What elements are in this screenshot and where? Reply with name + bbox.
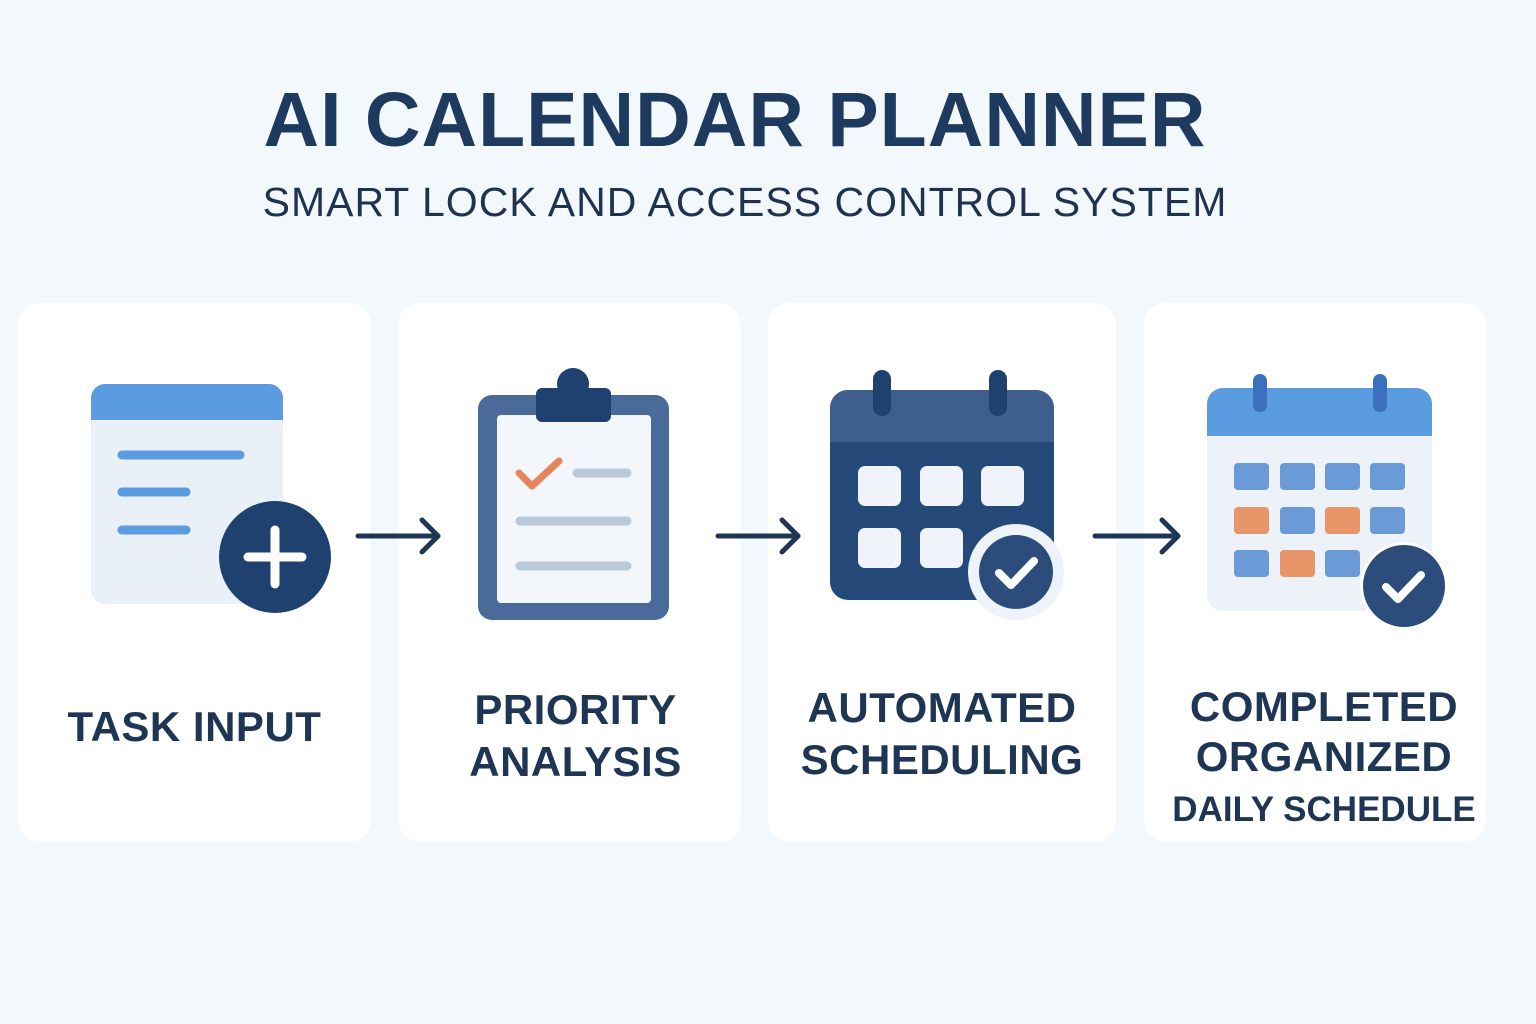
label: priority analysis: PRIORITY xyxy=(474,686,677,733)
icon: dark calendar xyxy=(830,370,1064,620)
panel: task input xyxy=(18,303,371,842)
icon: task document with plus xyxy=(91,384,331,613)
panel: priority analysis xyxy=(398,303,741,842)
label: task input: TASK INPUT xyxy=(68,703,321,750)
subtitle: SMART LOCK AND ACCESS CONTROL SYSTEM xyxy=(263,179,1227,225)
icon: completed calendar xyxy=(1207,374,1448,630)
icon: clipboard xyxy=(478,368,669,620)
label: priority analysis: ANALYSIS xyxy=(469,738,682,785)
label: automated scheduling xyxy=(801,684,1083,783)
title: AI CALENDAR PLANNER xyxy=(264,77,1206,163)
label: priority analysis xyxy=(469,686,682,785)
label: automated scheduling: SCHEDULING xyxy=(801,736,1083,783)
label: automated scheduling: AUTOMATED xyxy=(808,684,1076,731)
label: completed organized daily schedule: COMPLETED xyxy=(1190,683,1458,730)
panel: automated scheduling xyxy=(768,303,1116,842)
arrow 2 xyxy=(718,520,798,552)
label: completed organized daily schedule: ORGANIZED xyxy=(1196,733,1452,780)
label: completed organized daily schedule: DAILY SCHEDULE xyxy=(1172,790,1476,829)
panel: completed schedule xyxy=(1144,303,1486,842)
arrow 1 xyxy=(358,520,438,552)
label: completed organized daily schedule xyxy=(1172,683,1476,829)
arrow 3 xyxy=(1095,520,1178,552)
